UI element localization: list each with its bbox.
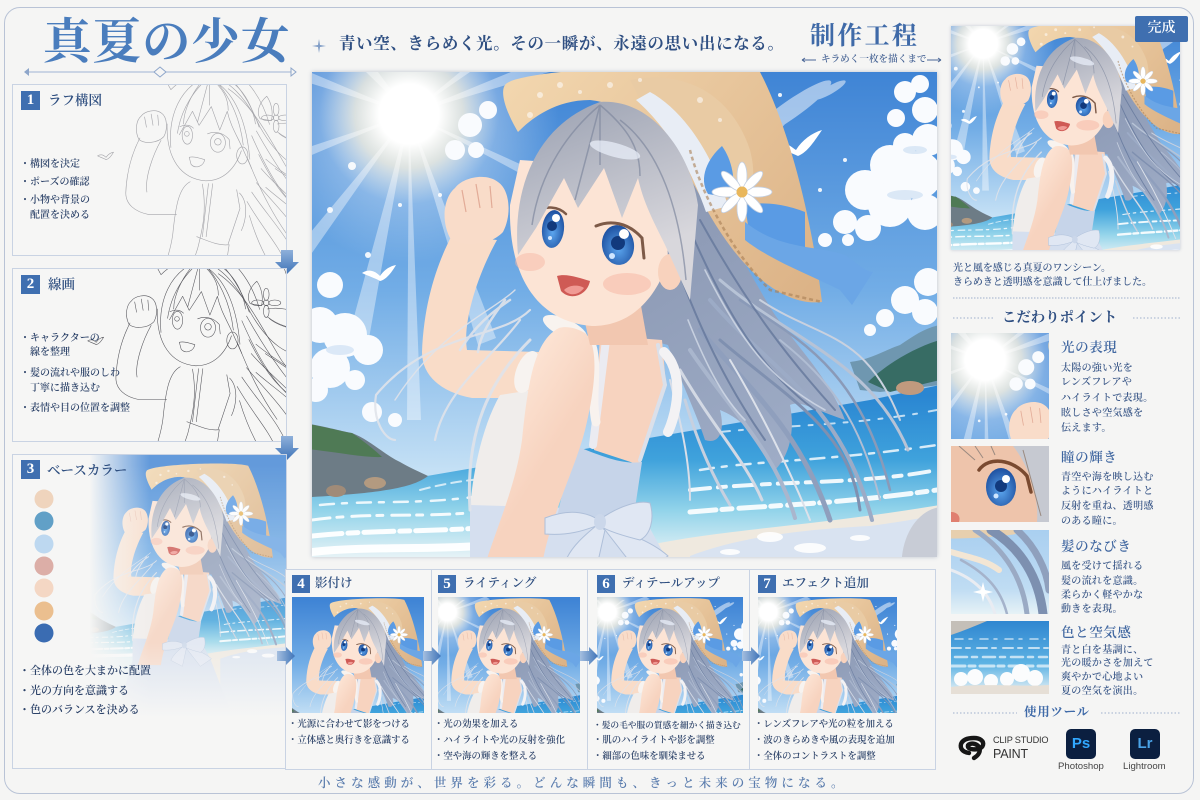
step number xyxy=(21,91,40,110)
logo text: CLIP STUDIO xyxy=(993,735,1048,745)
finished caption: 光と風を感じる真夏のワンシーン。 xyxy=(953,263,1111,274)
icon: Clip Studio mark xyxy=(957,734,987,762)
key point image: eye xyxy=(951,446,1049,522)
step title: エフェクト追加 xyxy=(782,576,869,590)
bullet list xyxy=(754,718,895,762)
panel: step 4 shading xyxy=(285,569,432,770)
panel: step 1 rough composition xyxy=(12,84,287,256)
step number: 2 xyxy=(27,276,34,292)
step number: 5 xyxy=(443,576,451,592)
bullet list: ・ハイライトや光の反射を強化 xyxy=(434,736,565,746)
panel: step 2 line art xyxy=(12,268,287,442)
bullet list: ・光の方向を意識する xyxy=(19,685,129,697)
badge: finished xyxy=(1135,16,1188,42)
app name: Photoshop xyxy=(1058,761,1104,772)
arrow: step 2 to 3 xyxy=(275,436,299,460)
icon: sparkle xyxy=(312,39,326,53)
heading dotted rules xyxy=(953,298,1180,318)
bullet list: ・全体の色を大まかに配置 xyxy=(19,665,151,677)
line art drawing xyxy=(87,269,286,441)
footer message: 小さな感動が、世界を彩る。どんな瞬間も、きっと未来の宝物になる。 xyxy=(318,776,848,790)
key point image: sea xyxy=(951,621,1049,694)
key point text: hair: 柔らかく軽やかな xyxy=(1061,590,1143,601)
bullet list: ・空や海の輝きを整える xyxy=(434,752,537,762)
panel: step 5 lighting xyxy=(431,569,588,770)
arrow: step 3 to 4 xyxy=(277,647,295,665)
step number: 6 xyxy=(602,576,610,592)
heading text: 使用ツール xyxy=(1024,705,1090,719)
badge: finished: 完成 xyxy=(1148,21,1176,36)
bullet list: ・細部の色味を馴染ませる xyxy=(593,752,706,762)
panel: step 3 base color xyxy=(12,454,287,769)
icon: Ps xyxy=(1066,729,1096,759)
bullet list xyxy=(20,158,90,221)
bullet list xyxy=(20,332,130,414)
bullet list: 配置を決める xyxy=(30,210,90,221)
shading illustration xyxy=(292,597,424,713)
bullet list: ・ポーズの確認 xyxy=(20,177,90,188)
heading dotted rules xyxy=(953,712,1180,714)
step number: 4 xyxy=(297,576,305,592)
step title: 影付け xyxy=(315,576,353,590)
key point text: colour and air: 爽やかで心地よい xyxy=(1061,672,1143,683)
bullet list: ・レンズフレアや光の粒を加える xyxy=(754,720,894,730)
arrow: step 6 to 7 xyxy=(742,647,760,665)
bullet list xyxy=(434,718,565,762)
bullet list: 丁寧に描き込む xyxy=(30,383,100,394)
key point text: eye xyxy=(1061,450,1154,527)
key point text: light: 太陽の強い光を xyxy=(1061,363,1133,374)
title ornament xyxy=(24,66,297,78)
wash fade xyxy=(13,455,286,768)
bullet list: ・光源に合わせて影をつける xyxy=(288,720,410,730)
bullet list: ・立体感と奥行きを意識する xyxy=(288,736,410,746)
step title: ディテールアップ xyxy=(622,576,720,590)
step number: 3 xyxy=(27,461,34,477)
bullet list: ・波のきらめきや風の表現を追加 xyxy=(754,736,895,746)
key point text: light: 伝えます。 xyxy=(1061,423,1112,434)
bullet list xyxy=(593,720,741,762)
bullet list xyxy=(19,664,151,716)
icon: Lr xyxy=(1130,729,1160,759)
step title: ラフ構図 xyxy=(48,93,102,108)
step number xyxy=(292,575,310,593)
bullet list: ・光の効果を加える xyxy=(434,720,518,730)
effects illustration xyxy=(758,597,897,713)
key point image: light xyxy=(951,333,1049,439)
bullet list xyxy=(288,718,410,746)
key point text: hair xyxy=(1061,539,1143,615)
key point text: light: ハイライトで表現。 xyxy=(1061,393,1153,404)
icon: Ps: Ps xyxy=(1072,735,1090,752)
tagline text: 青い空、きらめく光。その一瞬が、永遠の思い出になる。 xyxy=(339,34,785,53)
step number xyxy=(758,575,776,593)
key point text: colour and air: 夏の空気を演出。 xyxy=(1061,686,1143,697)
heading text: 制作工程 xyxy=(810,23,919,50)
step number xyxy=(21,275,40,294)
lighting illustration xyxy=(438,597,580,713)
key point text: colour and air: 光の暖かさを加えて xyxy=(1061,658,1154,669)
bullet list: ・肌のハイライトや影を調整 xyxy=(593,736,715,746)
bullet list: ・表情や目の位置を調整 xyxy=(20,403,130,414)
subtitle: キラめく一枚を描くまで xyxy=(821,54,927,65)
finished caption xyxy=(953,262,1152,288)
step number xyxy=(438,575,456,593)
bullet list: ・構図を決定 xyxy=(20,159,80,170)
rough sketch xyxy=(97,85,286,255)
step number: 1 xyxy=(27,92,34,108)
arrow: step 4 to 5 xyxy=(423,647,441,665)
key point text: eye: 青空や海を映し込む xyxy=(1061,472,1154,483)
key point text: hair: 風を受けて揺れる xyxy=(1061,561,1143,572)
key point text: hair: 髪の流れを意識。 xyxy=(1061,576,1143,587)
main illustration xyxy=(312,72,937,557)
base colour illustration xyxy=(93,455,286,696)
key point text: colour and air xyxy=(1061,625,1154,697)
key point text: light: レンズフレアや xyxy=(1061,377,1132,388)
title: 真夏の少女 xyxy=(43,16,291,69)
key point text: eye: 反射を重ね、透明感 xyxy=(1061,501,1154,512)
key point text: colour and air: 色と空気感 xyxy=(1061,625,1132,640)
bullet list: ・小物や背景の xyxy=(20,195,90,206)
key point text: eye: ようにハイライトと xyxy=(1061,486,1153,497)
key point image: hair xyxy=(951,530,1049,614)
bullet list: ・全体のコントラストを調整 xyxy=(754,752,876,762)
bullet list: ・髪の流れや服のしわ xyxy=(20,368,120,379)
icon: Lr: Lr xyxy=(1138,735,1152,752)
bullet list: ・髪の毛や服の質感を細かく描き込む xyxy=(593,720,741,730)
bullet list: ・色のバランスを決める xyxy=(19,704,140,716)
step title: 線画 xyxy=(48,277,75,292)
key point text: light: 光の表現 xyxy=(1061,340,1117,355)
bullet list: 線を整理 xyxy=(30,347,70,358)
finished illustration xyxy=(951,26,1180,250)
step number xyxy=(597,575,615,593)
key point text: eye: のある瞳に。 xyxy=(1061,516,1123,527)
step number: 7 xyxy=(763,576,771,592)
panel: step 6 detail up xyxy=(587,569,750,770)
key point text: light xyxy=(1061,340,1153,434)
step title: ベースカラー xyxy=(47,463,127,478)
step number xyxy=(21,460,40,479)
logo: Clip Studio Paint xyxy=(958,735,1048,761)
tagline xyxy=(312,34,785,53)
bullet list: ・キャラクターの xyxy=(20,333,100,344)
logo text line 2: PAINT xyxy=(993,747,1028,761)
key point text: hair: 動きを表現。 xyxy=(1061,604,1123,615)
colour palette xyxy=(34,490,54,642)
step title: ライティング xyxy=(463,576,536,590)
heading: production process xyxy=(802,22,942,65)
finished caption: きらめきと透明感を意識して仕上げました。 xyxy=(953,277,1152,288)
key point text: eye: 瞳の輝き xyxy=(1061,450,1117,465)
key point text: light: 眩しさや空気感を xyxy=(1061,408,1143,419)
logo: Photoshop xyxy=(1056,729,1106,773)
key point text: colour and air: 青と白を基調に、 xyxy=(1061,645,1143,656)
heading text: こだわりポイント xyxy=(1002,310,1117,326)
detail illustration xyxy=(597,597,743,713)
panel: step 7 effects xyxy=(749,569,936,770)
arrow: step 5 to 6 xyxy=(580,647,598,665)
subtitle arrows xyxy=(802,58,942,62)
arrow: step 1 to 2 xyxy=(275,250,299,274)
logo: Lightroom xyxy=(1121,729,1171,773)
key point text: hair: 髪のなびき xyxy=(1061,539,1132,554)
app name: Lightroom xyxy=(1123,761,1166,772)
